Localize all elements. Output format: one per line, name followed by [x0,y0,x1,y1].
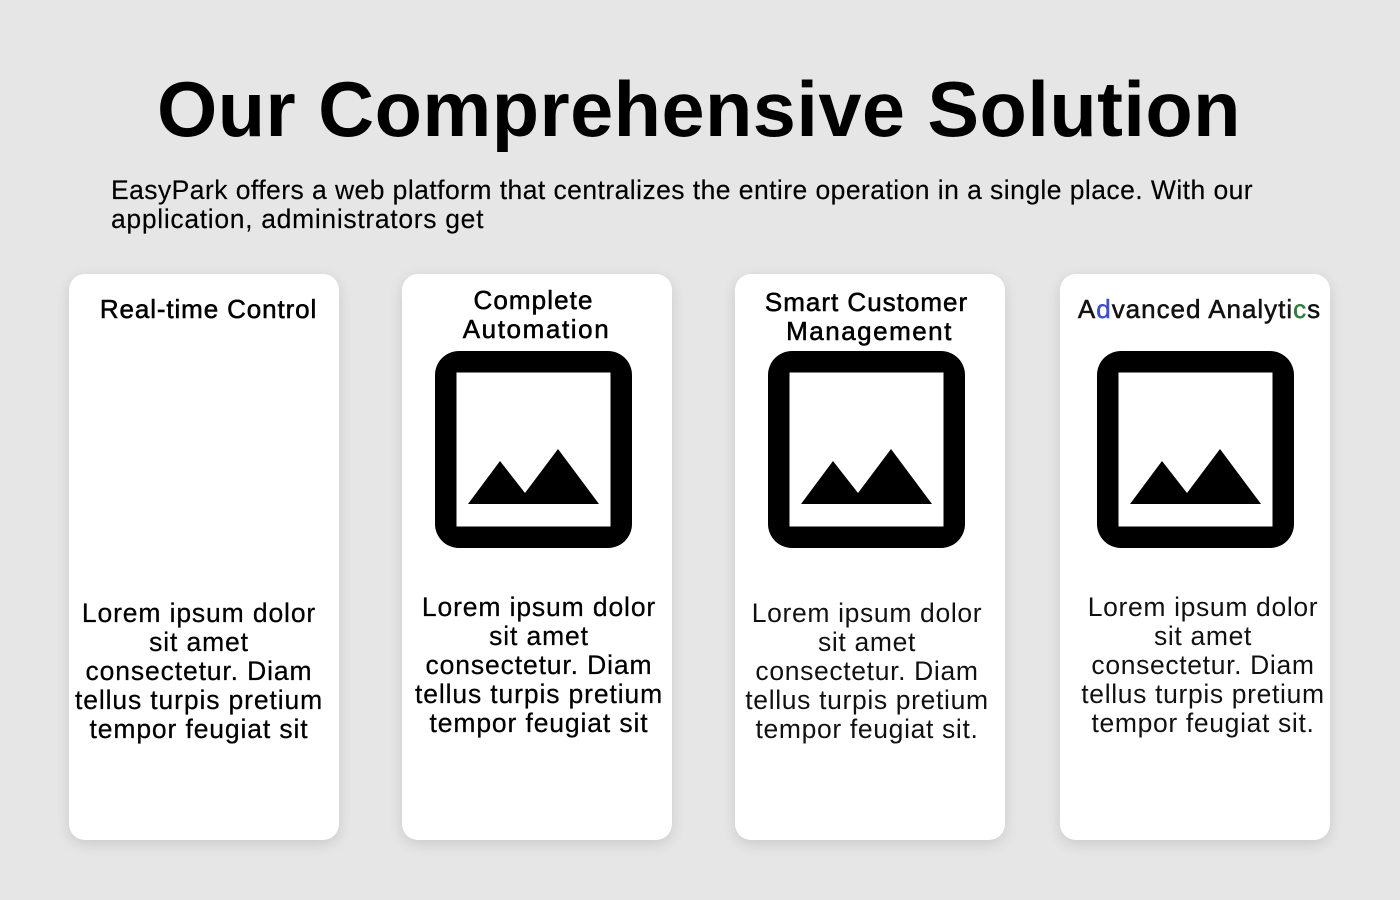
text: real-time control: sit amet [149,627,249,657]
icon: image placeholder [1097,351,1294,548]
icon: image placeholder [435,351,632,548]
text: real-time control [75,598,323,744]
text: smart customer management: consectetur. Diam [755,656,979,686]
panel: real-time control [69,274,339,840]
heading: smart customer management [765,287,968,346]
text: advanced analytics: consectetur. Diam [1091,650,1315,680]
text: smart customer management [745,598,989,744]
panel: advanced analytics [1060,274,1330,840]
text: advanced analytics: Lorem ipsum dolor [1088,592,1318,622]
heading: advanced analytics: Advanced Analytics [1078,294,1321,324]
heading: complete automation [462,285,610,344]
text: real-time control: Lorem ipsum dolor [82,598,316,628]
intro text [111,175,1253,234]
text: real-time control: tempor feugiat sit [90,714,308,744]
heading: smart customer management: Smart Customer [765,287,968,317]
text: advanced analytics: sit amet [1154,621,1252,651]
text: real-time control: consectetur. Diam [86,656,312,686]
intro text: application, administrators get [111,204,484,234]
text: smart customer management: tempor feugiat sit. [756,714,978,744]
intro text: EasyPark offers a web platform that centralizes the entire operation in a single place. With our [111,175,1253,205]
text: complete automation: Lorem ipsum dolor [422,592,656,622]
text: complete automation: tellus turpis pretium [415,679,663,709]
text: complete automation: tempor feugiat sit [430,708,648,738]
text: complete automation: sit amet [489,621,589,651]
text: advanced analytics [1081,592,1325,738]
panel: complete automation [402,274,672,840]
title: Our Comprehensive Solution [157,67,1241,153]
text: smart customer management: tellus turpis pretium [745,685,989,715]
heading: real-time control: Real-time Control [100,294,317,324]
icon: image placeholder [768,351,965,548]
text: advanced analytics: tellus turpis pretium [1081,679,1325,709]
text: smart customer management: Lorem ipsum dolor [752,598,982,628]
text: complete automation: consectetur. Diam [426,650,652,680]
text: complete automation [415,592,663,738]
heading: complete automation: Automation [463,314,610,344]
panel: smart customer management [735,274,1005,840]
text: real-time control: tellus turpis pretium [75,685,323,715]
text: smart customer management: sit amet [818,627,916,657]
text: advanced analytics: tempor feugiat sit. [1092,708,1314,738]
heading: smart customer management: Management [786,316,953,346]
heading: complete automation: Complete [473,285,594,315]
